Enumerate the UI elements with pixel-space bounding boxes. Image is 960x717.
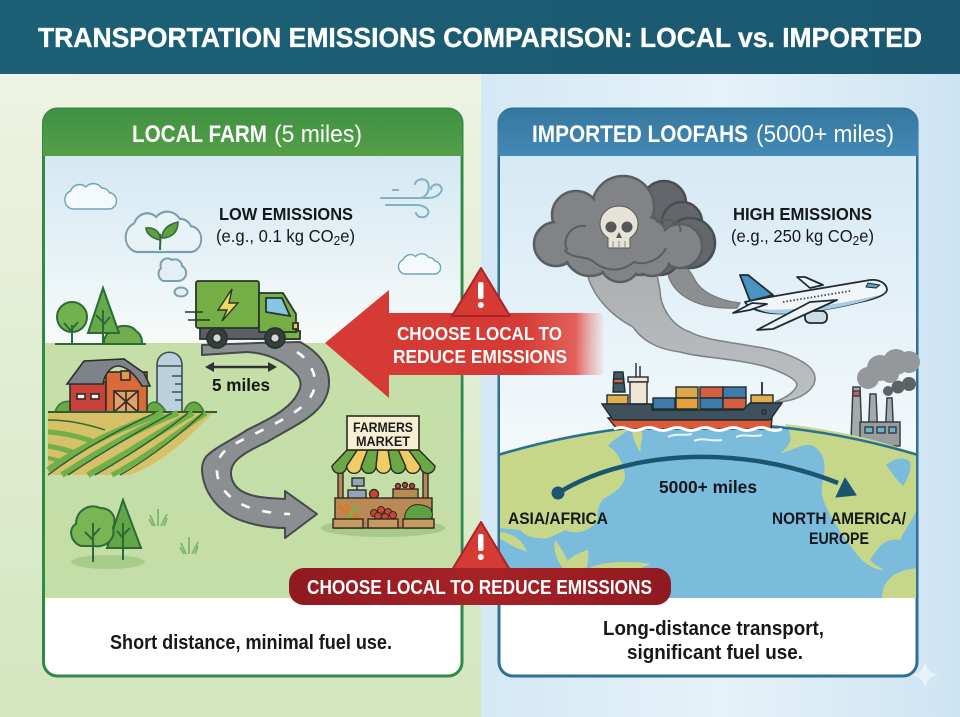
local header: (5 miles) xyxy=(274,121,362,148)
panel frame imported xyxy=(499,109,917,676)
background: right blue half xyxy=(481,0,960,717)
text: banner label: CHOOSE LOCAL TO REDUCE EMISSIONS xyxy=(307,577,652,599)
callout: banner choose local xyxy=(289,522,671,605)
icon: airplane xyxy=(733,275,887,330)
icon: small cloud left xyxy=(65,184,116,209)
text: arrow label: REDUCE EMISSIONS xyxy=(393,347,567,367)
icon: puff of vapour xyxy=(159,258,188,296)
local sky xyxy=(45,156,460,346)
text: long distance caption: significant fuel use. xyxy=(627,642,803,664)
icon: cargo ship xyxy=(602,363,782,430)
icon: factory with smoke xyxy=(851,349,920,446)
title banner xyxy=(0,0,960,74)
text: long distance caption xyxy=(603,618,824,664)
imported sky xyxy=(500,156,916,456)
panel: imported loofahs xyxy=(498,109,920,676)
text: farmers market sign: MARKET xyxy=(356,433,410,449)
local header xyxy=(43,109,462,156)
icon: grass tufts xyxy=(149,509,198,554)
text: short distance caption: Short distance, minimal fuel use. xyxy=(110,632,392,654)
text: 5 miles with double arrow xyxy=(205,362,277,395)
icon: red barn xyxy=(48,359,217,412)
text: farmers market sign: FARMERS xyxy=(353,419,413,435)
text: low emissions: LOW EMISSIONS xyxy=(219,204,353,224)
icon: smoke trail from ship to cloud xyxy=(587,273,815,402)
text: north america/europe xyxy=(772,509,906,548)
banner pill xyxy=(289,568,671,605)
text: high emissions: e) xyxy=(859,226,874,246)
text: 5000+ miles: 5000+ miles xyxy=(659,477,757,497)
icon: road xyxy=(202,342,329,538)
icon: warning triangle upper xyxy=(452,268,510,316)
text: arrow label xyxy=(393,324,567,367)
background: left green half xyxy=(0,0,481,717)
panel frame local xyxy=(44,109,462,676)
text: high emissions: (e.g., 250 kg CO xyxy=(731,226,859,246)
panel: local farm xyxy=(43,109,462,676)
callout: red arrow choose local xyxy=(325,268,603,398)
icon: wind lines xyxy=(381,179,442,217)
text: arrow label: CHOOSE LOCAL TO xyxy=(397,324,562,344)
text: high emissions: 2 xyxy=(853,234,859,248)
text: farmers market sign xyxy=(347,416,419,450)
icon: shipping route arc xyxy=(552,457,856,500)
text: low emissions: (e.g., 0.1 kg CO xyxy=(216,226,340,246)
text: high emissions: HIGH EMISSIONS xyxy=(733,204,872,224)
imported header: (5000+ miles) xyxy=(756,121,894,148)
icon: cloud with leaves xyxy=(126,212,201,252)
text: north america/europe: EUROPE xyxy=(809,529,869,548)
text: low emissions: 2 xyxy=(334,234,340,248)
icon: globe with continents xyxy=(498,424,918,600)
text: long distance caption: Long-distance transport, xyxy=(603,618,824,640)
icon: electric truck xyxy=(185,281,300,348)
imported header: IMPORTED LOOFAHS xyxy=(532,121,748,148)
local ground xyxy=(45,343,460,598)
icon: farmers market stall xyxy=(321,450,445,537)
icon: sparkle watermark xyxy=(910,660,940,690)
icon: top-left trees xyxy=(55,288,146,344)
icon: crop fields xyxy=(48,413,213,475)
icon: skull storm cloud xyxy=(534,176,715,282)
text: north america/europe: NORTH AMERICA/ xyxy=(772,509,906,528)
icon: lower-left trees xyxy=(71,500,145,569)
imported header xyxy=(498,109,918,156)
icon: sea waves xyxy=(668,434,762,441)
text: low emissions: e) xyxy=(340,226,355,246)
text: high emissions xyxy=(731,204,874,248)
text: 5 miles with double arrow: 5 miles xyxy=(212,375,270,395)
icon: smoke trail from plane xyxy=(667,262,740,308)
title banner: TRANSPORTATION EMISSIONS COMPARISON: LOCAL vs. IMPORTED xyxy=(38,22,922,53)
icon: small cloud right xyxy=(398,254,441,274)
local header: LOCAL FARM xyxy=(132,121,267,148)
text: asia/africa: ASIA/AFRICA xyxy=(508,509,608,528)
icon: silo xyxy=(157,352,182,412)
icon: warning triangle lower xyxy=(452,522,510,570)
text: low emissions xyxy=(216,204,355,248)
